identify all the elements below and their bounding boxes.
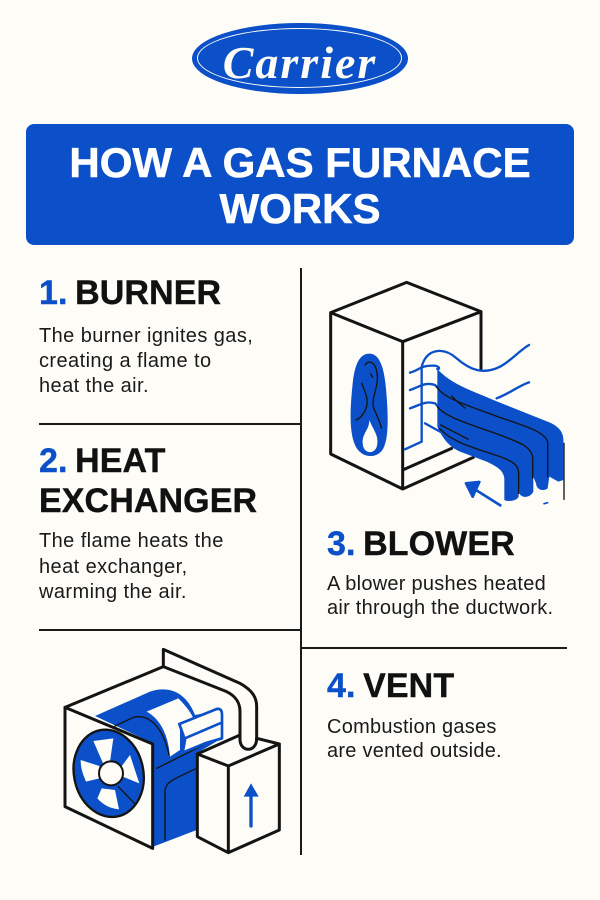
section 1: burner: 1. BURNER (39, 274, 221, 312)
section 1: burner: The burner ignites gas, (39, 325, 253, 347)
blue duct ribbons (405, 345, 564, 505)
section 2: heat exchanger (39, 442, 257, 603)
section 3: blower: air through the ductwork. (327, 596, 553, 618)
section 1: burner (39, 274, 253, 397)
title banner: WORKS (220, 185, 380, 232)
housing front with fan (65, 707, 153, 848)
title banner (26, 124, 574, 245)
housing top and vent pipe (65, 649, 257, 740)
blue blower drum (95, 689, 222, 847)
section 2: heat exchanger: heat exchanger, (39, 556, 188, 578)
section 1: burner: creating a flame to (39, 350, 212, 372)
section 2: heat exchanger: 2. HEAT (39, 442, 166, 480)
section 4: vent: 4. VENT (327, 667, 454, 705)
section 3: blower: A blower pushes heated (327, 573, 546, 595)
icon: furnace box with ducts (329, 280, 565, 507)
vent box with arrow (197, 735, 279, 853)
section 1: burner: heat the air. (39, 375, 149, 397)
section 4: vent: Combustion gases (327, 716, 497, 738)
section 2: heat exchanger: The flame heats the (39, 530, 224, 552)
section 3: blower: 3. BLOWER (327, 525, 515, 563)
section 2: heat exchanger: warming the air. (39, 581, 187, 603)
section 4: vent: are vented outside. (327, 740, 502, 762)
section 4: vent (327, 667, 502, 762)
logo: Carrier: Carrier (223, 37, 377, 88)
icon: flame oval (351, 354, 388, 456)
section 2: heat exchanger: EXCHANGER (39, 482, 257, 520)
icon: blower unit with fan and vent box (63, 648, 281, 854)
logo: Carrier (192, 23, 408, 94)
section 3: blower (327, 525, 553, 618)
title banner: HOW A GAS FURNACE (69, 139, 531, 186)
